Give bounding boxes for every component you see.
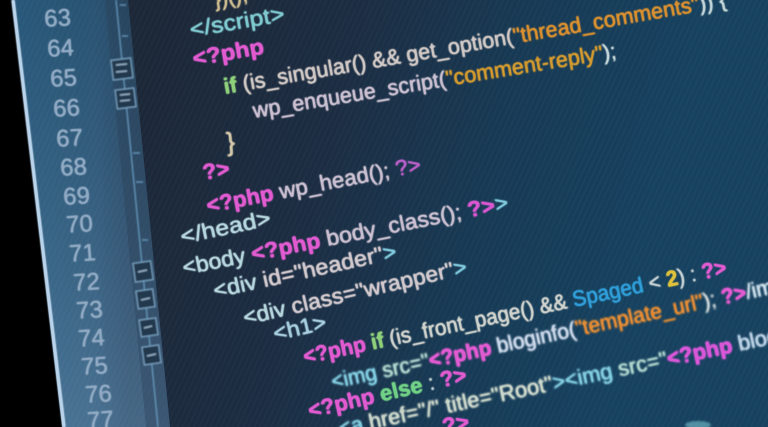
body line: <body <?php body_class(); ?>> [180,190,510,280]
bottom blurred fragment [685,421,711,427]
php close: ?> [201,156,231,185]
code lines [178,0,768,427]
div header: <div id="header"> [211,239,399,303]
line numbers: 63 [44,4,72,33]
line numbers: 64 [47,34,75,63]
line numbers: 65 [50,64,78,93]
img bloginfo line: <img src="<?php bloginfo("template_url"); ?>/im [329,274,768,394]
line numbers: 66 [53,94,81,123]
screen edge highlight [13,0,64,427]
wp_head line: <?php wp_head(); ?> [204,152,423,218]
closing head: </head> [178,205,273,249]
line numbers: 72 [72,268,101,297]
wp_enqueue_script line: wp_enqueue_script("comment-reply"); [250,38,618,123]
closing brace: } [225,126,236,157]
php open: <?php [191,34,266,71]
line numbers [44,4,115,427]
line numbers: 68 [60,153,88,182]
line numbers: 71 [68,239,97,268]
black screen edge [0,0,62,427]
line numbers: 73 [75,296,104,325]
if front page line: <?php if (is_front_page() && Spaged < 2) : ?> [301,255,729,369]
line numbers: 69 [63,182,91,211]
h1: <h1> [271,309,329,346]
closing script tag: </script> [188,1,286,42]
line-number gutter [12,0,170,427]
php else line: <?php else : ?> [306,362,469,423]
line numbers: 76 [84,380,113,409]
line numbers: 74 [77,324,106,353]
line numbers: 70 [65,210,94,239]
line numbers: 67 [56,124,84,153]
code folding tree [111,0,161,427]
div wrapper: <div class="wrapper"> [241,254,469,330]
line numbers: 75 [80,352,109,381]
